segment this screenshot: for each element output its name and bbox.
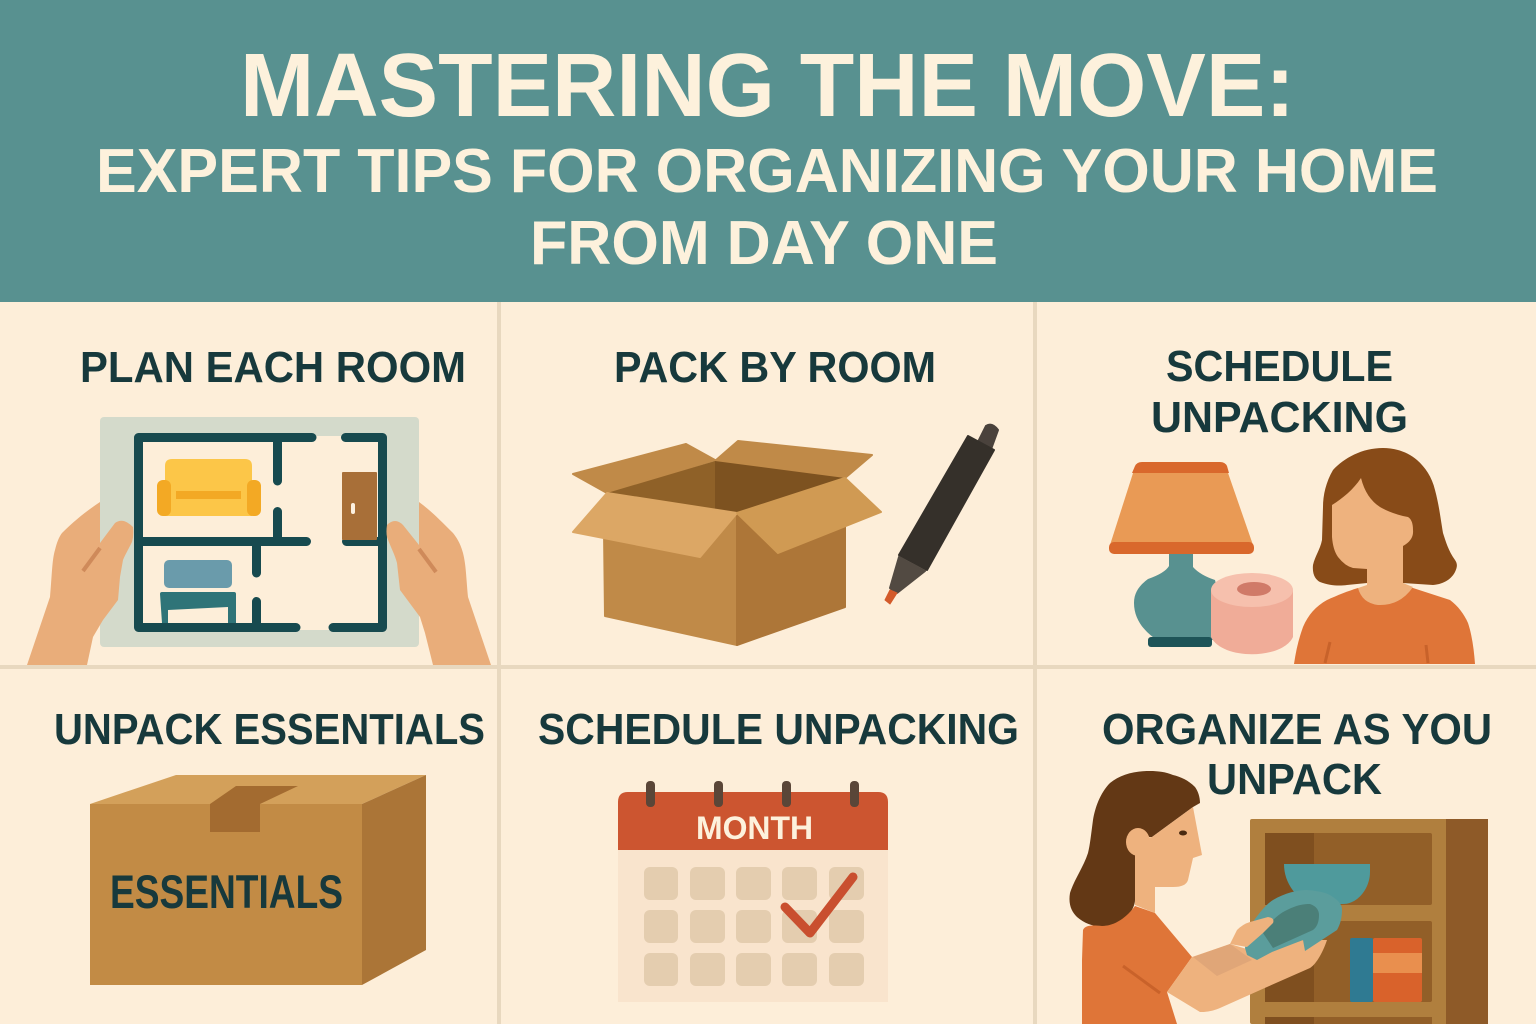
heading [1102,705,1492,804]
icon: calendar [618,781,888,1002]
icon: lamp [1109,462,1254,647]
title: MASTERING THE MOVE: [240,36,1295,136]
panel: pack by room [573,343,998,645]
panel: schedule unpacking (top) [1109,342,1475,664]
heading: UNPACK [1207,755,1382,804]
icon: floor plan tablet [27,417,491,665]
bowl on shelf [1284,864,1370,904]
door [342,472,377,540]
heading: ORGANIZE AS YOU [1102,705,1492,754]
header banner [0,0,1536,302]
icon: person [1294,448,1475,664]
heading: UNPACK ESSENTIALS [54,705,485,754]
icon: person with dish [1069,771,1342,1024]
heading: SCHEDULE UNPACKING [538,705,1019,754]
icon: tape roll [1211,573,1293,654]
heading: UNPACKING [1151,393,1408,442]
subtitle [96,137,1438,278]
panel: organize as you unpack [1069,705,1492,1024]
icon: essentials box [90,775,426,985]
box label: ESSENTIALS [110,865,343,918]
panel: schedule unpacking (calendar) [538,705,1019,1002]
month label: MONTH [696,810,813,846]
left hand [27,502,133,665]
right hand [386,502,491,665]
heading: SCHEDULE [1166,342,1393,391]
icon: bookshelf [1250,819,1488,1024]
icon: marker [885,425,998,604]
subtitle: EXPERT TIPS FOR ORGANIZING YOUR HOME [96,137,1438,206]
heading: PLAN EACH ROOM [80,343,466,392]
subtitle: FROM DAY ONE [530,209,998,278]
icon: open box [573,441,881,645]
check mark [785,877,853,933]
sofa [157,459,261,516]
day grid [644,867,864,986]
panel: plan each room [27,343,491,665]
heading: PACK BY ROOM [614,343,936,392]
chair [160,560,236,623]
panel: unpack essentials [54,705,485,985]
heading [1151,342,1408,442]
